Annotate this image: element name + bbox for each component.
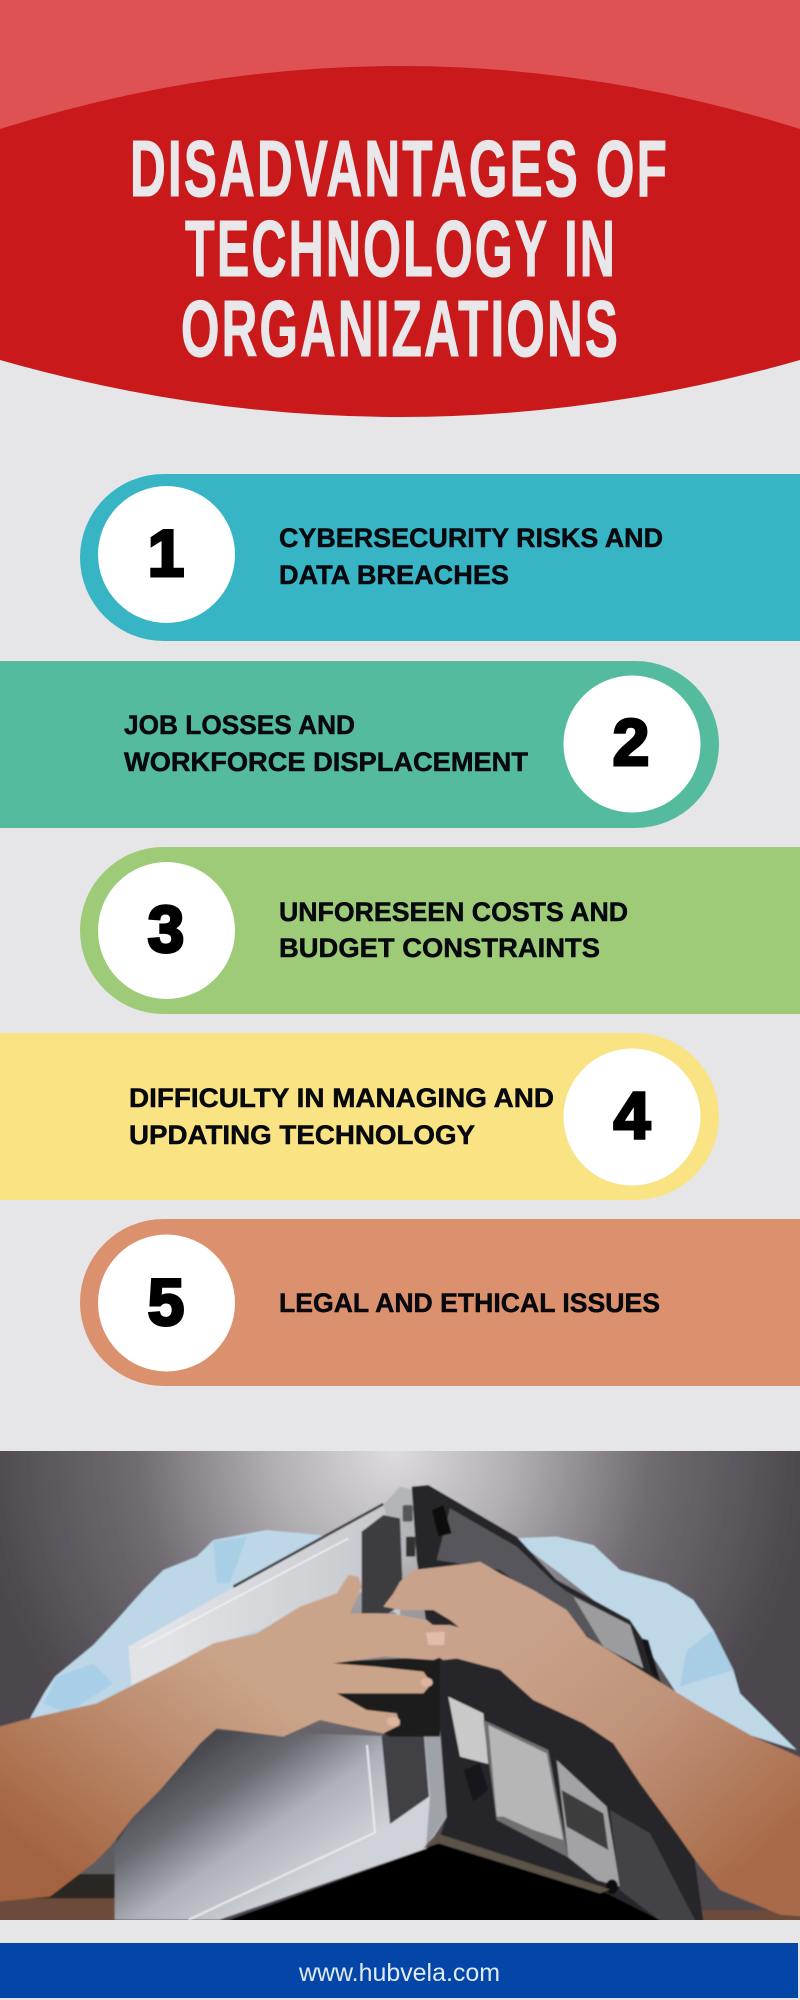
laptop base	[412, 1485, 704, 1923]
right arm and hand	[383, 1562, 800, 1917]
footer url: www.hubvela.com	[298, 1959, 500, 1987]
item 5 text: LEGAL AND ETHICAL ISSUES	[279, 1288, 660, 1318]
panel: item 5 legal and ethical	[80, 1219, 800, 1386]
panel: item 3 unforeseen costs	[80, 847, 800, 1014]
photo: man hiding under a laptop	[0, 1447, 800, 1927]
item 4 text: DIFFICULTY IN MANAGING AND	[129, 1083, 554, 1113]
hand shadow gaps	[333, 1657, 440, 1737]
shirt right	[513, 1537, 797, 1750]
laptop feet and ports	[432, 1505, 452, 1537]
number badge 3	[98, 862, 235, 999]
laptop lid upper	[128, 1503, 400, 1685]
number badge 5	[98, 1234, 235, 1372]
left arm and hand	[0, 1575, 450, 1902]
item 1 text	[279, 523, 663, 590]
number badge 1	[98, 486, 235, 623]
item 1 text: CYBERSECURITY RISKS AND	[279, 523, 663, 553]
lid dark strip upper	[362, 1515, 403, 1613]
number badge 5: 5	[148, 1265, 184, 1339]
table	[36, 1874, 115, 1899]
item 3 text: BUDGET CONSTRAINTS	[279, 933, 600, 963]
item 3 text	[279, 897, 628, 963]
item 4 text: UPDATING TECHNOLOGY	[129, 1120, 475, 1150]
item 3 text: UNFORESEEN COSTS AND	[279, 897, 628, 927]
number badge 1: 1	[148, 516, 184, 590]
footer bar	[0, 1943, 798, 1998]
shirt left	[29, 1529, 323, 1720]
title	[130, 124, 669, 373]
panel: item 4 difficulty managing	[0, 1033, 719, 1200]
number badge 2: 2	[613, 705, 649, 779]
item 1 text: DATA BREACHES	[279, 560, 509, 590]
number badge 3: 3	[148, 892, 184, 966]
item 2 text: JOB LOSSES AND	[124, 710, 355, 740]
header top band	[0, 0, 800, 135]
item 2 text	[124, 710, 529, 777]
number badge 4: 4	[614, 1078, 651, 1152]
shadow under laptop	[227, 1843, 661, 1920]
overlapping right-hand finger	[432, 1624, 466, 1662]
laptop lid lower	[114, 1730, 448, 1920]
item 2 text: WORKFORCE DISPLACEMENT	[124, 747, 529, 777]
item 4 text	[129, 1083, 554, 1150]
panel: item 1 cybersecurity	[80, 474, 800, 641]
header red ellipse	[0, 66, 800, 417]
header banner	[0, 0, 800, 417]
panel: item 2 job losses	[0, 661, 719, 828]
number badge 4	[564, 1048, 700, 1186]
number badge 2	[564, 676, 700, 812]
